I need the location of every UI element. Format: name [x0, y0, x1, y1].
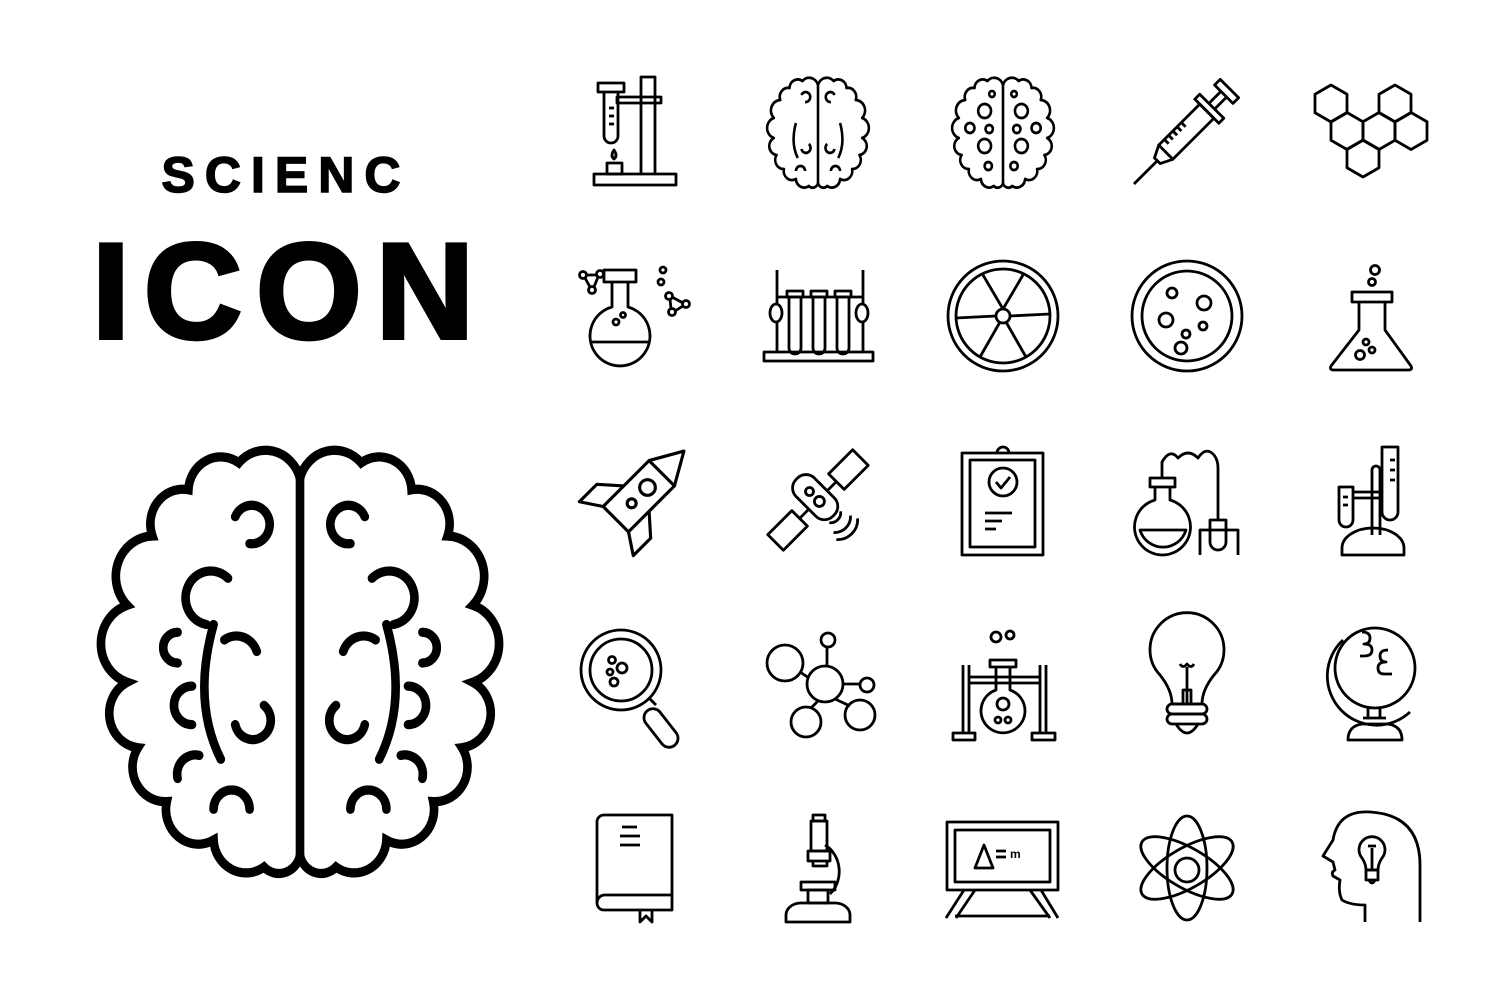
icon: head with idea bulb — [1323, 812, 1420, 922]
icon: test tube stand with burner — [594, 77, 676, 185]
icon: hexagon molecule — [1315, 85, 1427, 177]
icon: test tube rack — [764, 270, 873, 361]
icon: clipboard — [962, 447, 1043, 555]
icon: distillation apparatus — [1135, 451, 1238, 555]
icon: test tube holder — [1339, 447, 1404, 555]
big brain icon — [101, 450, 499, 873]
icon: light bulb — [1150, 613, 1224, 733]
icon: book — [597, 815, 672, 922]
icon: microscope — [786, 815, 850, 922]
icon: globe — [1327, 628, 1415, 740]
icon: conical flask — [1330, 266, 1412, 370]
icon: magnifying glass — [581, 630, 682, 751]
icon: presentation board — [946, 822, 1058, 918]
icon: satellite — [754, 436, 894, 576]
title: ICON: ICON — [92, 215, 488, 367]
icon: radiation wheel — [948, 261, 1058, 371]
icon: brain — [767, 78, 869, 188]
icon: molecule structure — [767, 633, 875, 737]
icon: atom — [1132, 816, 1242, 920]
icon: brain with cells — [952, 78, 1054, 188]
icon: presentation board: m — [1010, 847, 1021, 861]
icon: round flask with molecules — [580, 267, 690, 366]
icon: flask on stand — [953, 631, 1055, 740]
icon: petri dish — [1132, 261, 1242, 371]
icon: syringe — [1122, 77, 1241, 196]
title: SCIENC: SCIENC — [162, 147, 410, 203]
icon: rocket — [579, 424, 711, 556]
